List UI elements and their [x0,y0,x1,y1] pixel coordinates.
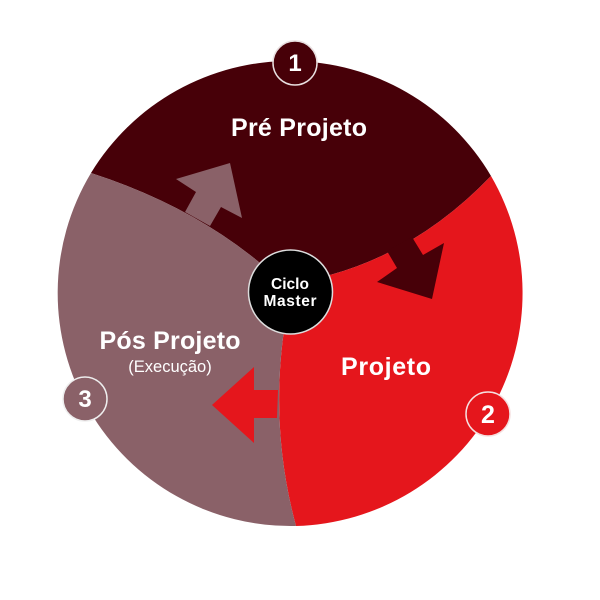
number badge 2 [466,392,510,436]
number badge 2: 2 [481,401,495,429]
heading: Pós Projeto: Pós Projeto [100,327,240,355]
number badge 3: 3 [78,386,92,413]
number badge 1: 1 [288,50,302,77]
arrow: Projeto to Pós Projeto [212,367,278,443]
heading: Projeto: Projeto [341,353,431,381]
number badge 3 [63,377,107,421]
center badge: Ciclo Master: Master [264,293,316,310]
segment: Pós Projeto [58,173,296,526]
number badge 1 [273,41,317,85]
center badge: Ciclo Master: Ciclo [271,276,309,293]
arrow: Pré Projeto to Projeto [377,237,444,299]
subheading: Execução: (Execução) [128,358,212,376]
segment: Projeto [279,176,523,526]
segment: Pré Projeto [91,61,491,292]
arrow: Pós Projeto to Pré Projeto [176,163,242,226]
center badge: Ciclo Master [248,250,332,334]
heading: Pré Projeto: Pré Projeto [231,114,367,142]
